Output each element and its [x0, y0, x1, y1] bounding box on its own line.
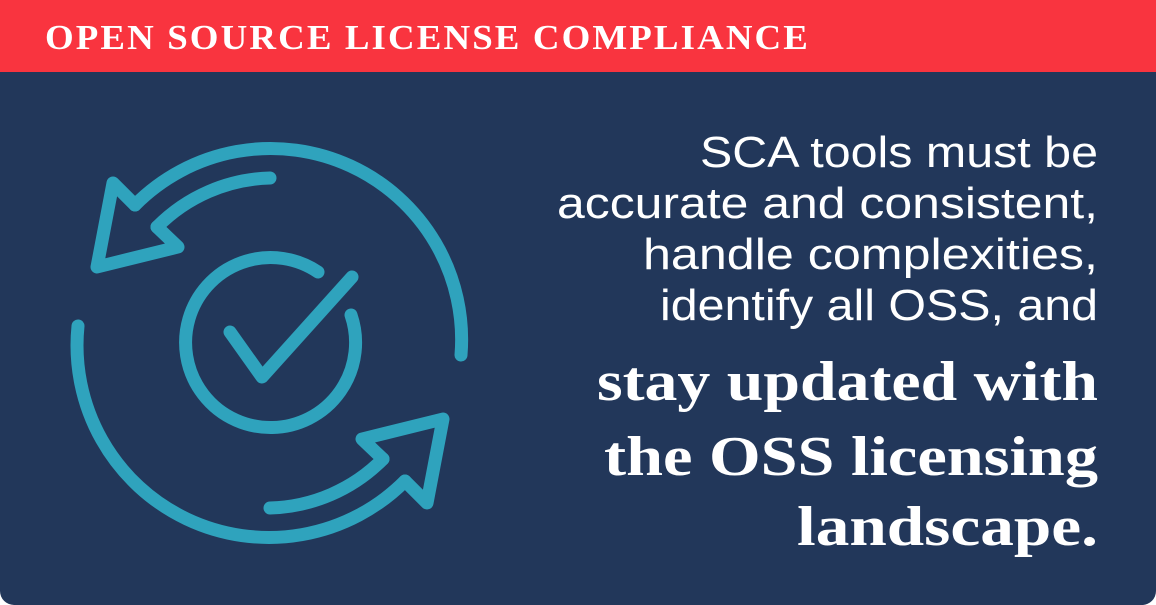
icon: refresh cycle with check	[77, 148, 462, 537]
main message text: SCA tools must be	[700, 128, 1098, 177]
main message text	[557, 128, 1098, 558]
main message text: the OSS licensing	[604, 426, 1098, 488]
header title: OPEN SOURCE LICENSE COMPLIANCE	[45, 18, 810, 57]
main message text: handle complexities,	[643, 230, 1098, 279]
main message text: accurate and consistent,	[557, 179, 1098, 228]
main message text: stay updated with	[597, 351, 1098, 413]
header band	[0, 0, 1156, 72]
main message text: identify all OSS, and	[660, 281, 1098, 330]
main message text: landscape.	[797, 496, 1098, 558]
